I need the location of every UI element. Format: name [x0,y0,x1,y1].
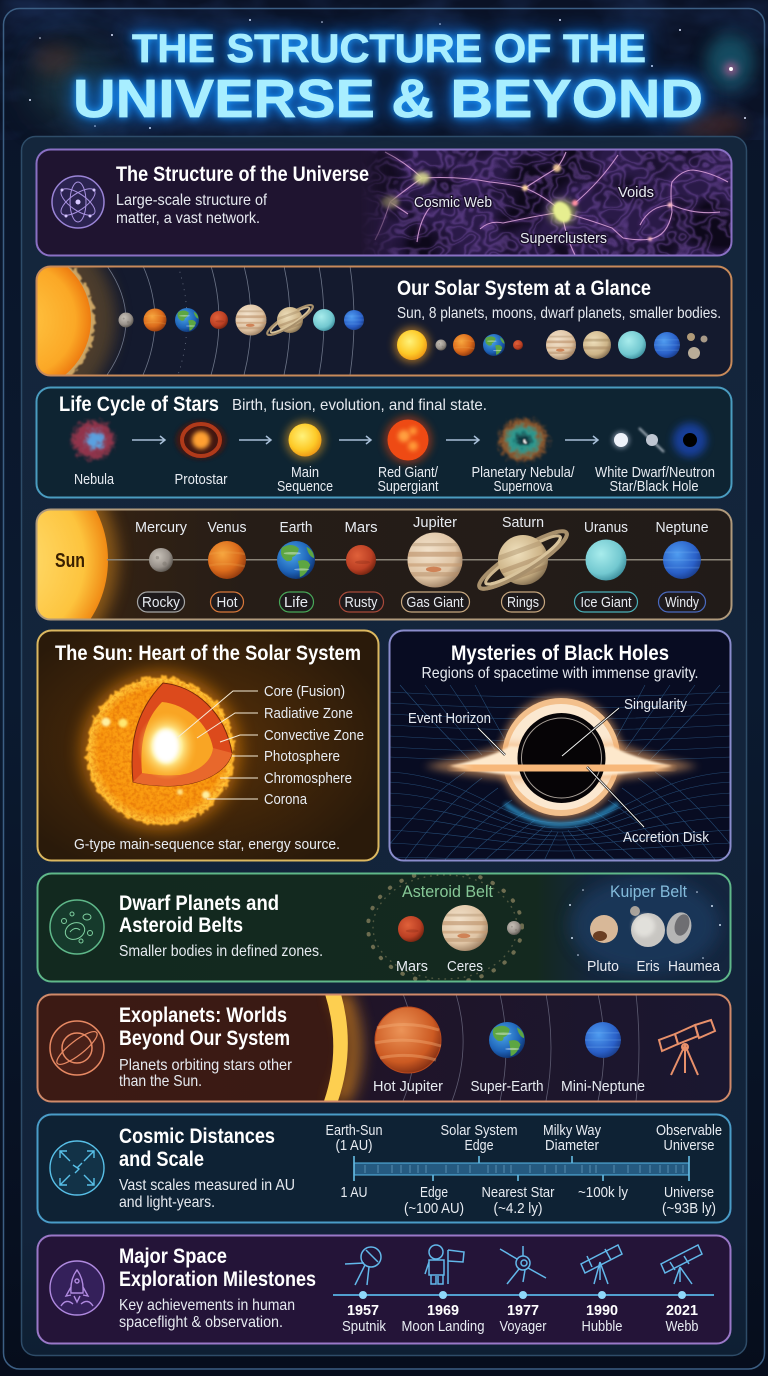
heading: Life Cycle of Stars [59,393,219,416]
panel: dwarf planets [38,871,730,983]
description: spaceflight & observation. [119,1314,283,1331]
orbit line [107,559,731,560]
arrows [132,436,598,444]
stellar remnants [612,423,707,457]
stage labels: Star/Black Hole [610,478,698,495]
timeline [333,1291,714,1299]
icon: astronaut [425,1245,464,1284]
top scale labels: Edge [464,1137,494,1154]
heading [119,1125,275,1171]
caption: G-type main-sequence star, energy source. [74,836,340,853]
heading [119,1245,316,1291]
main sequence [285,420,325,460]
bottom scale labels: (~93B ly) [662,1200,716,1217]
pill labels: Rings [507,594,539,611]
icon: atom [52,176,104,228]
asteroid ring [368,871,522,983]
nebula [72,421,114,459]
mission names: Voyager [500,1318,546,1335]
exoplanets [375,1007,621,1073]
top scale labels: Solar System [440,1122,518,1139]
callouts [408,696,709,846]
heading: The Structure of the Universe [116,163,369,186]
stage labels: Sequence [277,478,333,495]
kuiper haze [569,877,721,973]
asteroid belt group: Asteroid Belt [402,882,493,901]
heading: Beyond Our System [119,1027,290,1050]
icon: scale arrows [50,1141,104,1195]
star crescent [324,994,361,1101]
bottom scale labels: Nearest Star [482,1184,555,1201]
heading: and Scale [119,1148,204,1171]
description: Regions of spacetime with immense gravity. [422,665,698,682]
icon: telescope [659,1020,715,1075]
layer labels: Chromosphere [264,770,352,787]
blue glow [505,804,618,824]
icon: hubble telescope [581,1245,622,1284]
stage labels: Red Giant/ [378,464,439,481]
planet names: Venus [208,519,246,536]
years [347,1302,698,1319]
top scale labels: Diameter [545,1137,599,1154]
description: Smaller bodies in defined zones. [119,943,323,960]
mission names: Moon Landing [402,1318,484,1335]
stage labels [74,464,715,495]
layer labels: Corona [264,791,308,808]
description: Key achievements in human [119,1297,295,1314]
orbits [107,266,354,375]
orbits [403,994,639,1101]
top scale labels: Universe [664,1137,714,1154]
description: than the Sun. [119,1073,202,1090]
stage labels: Supergiant [378,478,439,495]
top scale labels: Earth-Sun [326,1122,382,1139]
pill labels: Hot [216,594,238,611]
bright disk band [446,764,678,772]
panel: solar system at a glance [36,266,732,376]
planets row [118,301,364,339]
title: UNIVERSE & BEYOND [73,69,703,129]
planet names: Uranus [584,519,628,536]
web labels: Superclusters [520,230,607,247]
stage labels: Protostar [174,471,228,488]
cosmic web image [360,149,732,256]
pill labels: Rocky [142,594,180,611]
years: 1977 [507,1302,539,1319]
sun [38,510,128,618]
pill labels: Rusty [344,594,378,611]
warped spacetime grid [389,685,731,861]
layer labels: Radiative Zone [264,705,353,722]
stage labels: Planetary Nebula/ [472,464,575,481]
kuiper belt group: Pluto [587,958,619,975]
callouts: Accretion Disk [623,829,709,846]
panel: life cycle of stars [36,388,732,498]
bottom scale labels: Universe [664,1184,714,1201]
planet names [135,514,708,536]
description: Birth, fusion, evolution, and final state. [232,397,487,414]
panel: planet lineup [36,508,732,620]
icon: rocket [50,1261,104,1315]
heading: Exploration Milestones [119,1268,316,1291]
heading: Our Solar System at a Glance [397,277,651,300]
pill labels: Life [284,594,308,611]
heading: Dwarf Planets and [119,892,279,915]
sun label: Sun [55,550,85,572]
bottom scale labels: ~100k ly [578,1184,628,1201]
heading: Asteroid Belts [119,914,243,937]
leader lines [177,691,258,799]
planet labels [373,1078,645,1095]
icon: sputnik [345,1247,381,1285]
pill labels: Gas Giant [406,594,464,611]
top scale labels [326,1122,722,1154]
panel: the sun [38,630,378,860]
title [73,27,703,129]
years: 1957 [347,1302,379,1319]
pill labels [142,594,699,611]
kuiper belt group: Eris [636,958,660,975]
small planets row [394,327,708,363]
bottom scale labels: 1 AU [340,1184,368,1201]
heading: Cosmic Distances [119,1125,275,1148]
panel: exploration milestones [38,1236,730,1344]
heading: Exoplanets: Worlds [119,1004,287,1027]
planetary nebula [499,419,547,461]
asteroid belt group: Mars [396,958,428,975]
bottom scale labels [340,1184,716,1217]
planet labels: Mini-Neptune [561,1078,645,1095]
panel: structure of the universe [36,149,732,256]
mission names: Sputnik [342,1318,386,1335]
kuiper belt group: Haumea [668,958,721,975]
accretion rings [500,695,622,819]
kuiper belt group: Kuiper Belt [610,882,687,901]
web labels: Voids [618,184,654,201]
title: THE STRUCTURE OF THE [132,27,646,71]
callouts: Event Horizon [408,710,491,727]
icon: ringed planet [50,1021,104,1075]
planet names: Mercury [135,519,187,536]
protostar [176,421,226,459]
description: matter, a vast network. [116,210,260,227]
description [119,1297,295,1331]
panel: exoplanets [38,994,730,1102]
heading [119,892,279,937]
description [116,192,267,227]
description: Large-scale structure of [116,192,267,209]
web labels: Cosmic Web [414,194,492,211]
years: 2021 [666,1302,698,1319]
description: Vast scales measured in AU [119,1177,295,1194]
mission names: Hubble [582,1318,622,1335]
planet names: Saturn [502,514,544,531]
heading: The Sun: Heart of the Solar System [55,642,361,665]
planet names: Earth [280,519,312,536]
icon: voyager [500,1246,546,1284]
asteroid belt group [396,882,521,975]
description [119,1057,293,1090]
black hole shadow [518,713,606,803]
bottom scale labels: (~100 AU) [404,1200,464,1217]
planet labels: Hot Jupiter [373,1078,443,1095]
stage labels: Supernova [494,478,553,495]
heading: Major Space [119,1245,227,1268]
stage labels: White Dwarf/Neutron [595,464,715,481]
icon: webb telescope [661,1245,702,1284]
mission names [342,1318,698,1335]
heading [119,1004,290,1050]
asteroid belt group: Ceres [447,958,483,975]
stage labels: Nebula [74,471,115,488]
mission names: Webb [666,1318,698,1335]
panel: black holes [389,630,731,861]
layer labels: Convective Zone [264,727,364,744]
callouts: Singularity [624,696,687,713]
description [119,1177,295,1211]
top scale labels: (1 AU) [336,1137,372,1154]
heading: Mysteries of Black Holes [451,642,669,665]
layer labels: Core (Fusion) [264,683,345,700]
sun cutaway diagram [80,671,240,831]
top scale labels: Milky Way [543,1122,601,1139]
years: 1969 [427,1302,459,1319]
pill labels: Windy [665,594,699,611]
years: 1990 [586,1302,618,1319]
wide disk [424,742,698,781]
stage labels: Main [291,464,319,481]
red giant [384,416,432,464]
pill labels: Ice Giant [580,594,632,611]
scale bar [354,1156,689,1181]
planets [149,524,701,596]
planet names: Neptune [656,519,708,536]
description: and light-years. [119,1194,215,1211]
description: Sun, 8 planets, moons, dwarf planets, smaller bodies. [397,305,721,322]
panel: cosmic distances [38,1114,730,1222]
planet names: Mars [344,519,378,536]
top scale labels: Observable [656,1122,722,1139]
planet labels: Super-Earth [470,1078,544,1095]
sun [36,268,124,374]
web labels [414,184,654,247]
icon: asteroid cluster [50,900,104,954]
bottom scale labels: Edge [420,1184,448,1201]
description: Planets orbiting stars other [119,1057,293,1074]
bottom scale labels: (~4.2 ly) [494,1200,542,1217]
layer labels: Photosphere [264,748,340,765]
kuiper belt group [587,882,721,975]
layer labels [264,683,364,808]
trait pills [138,592,706,612]
nebula header backdrop [0,0,768,140]
planet names: Jupiter [413,514,457,531]
